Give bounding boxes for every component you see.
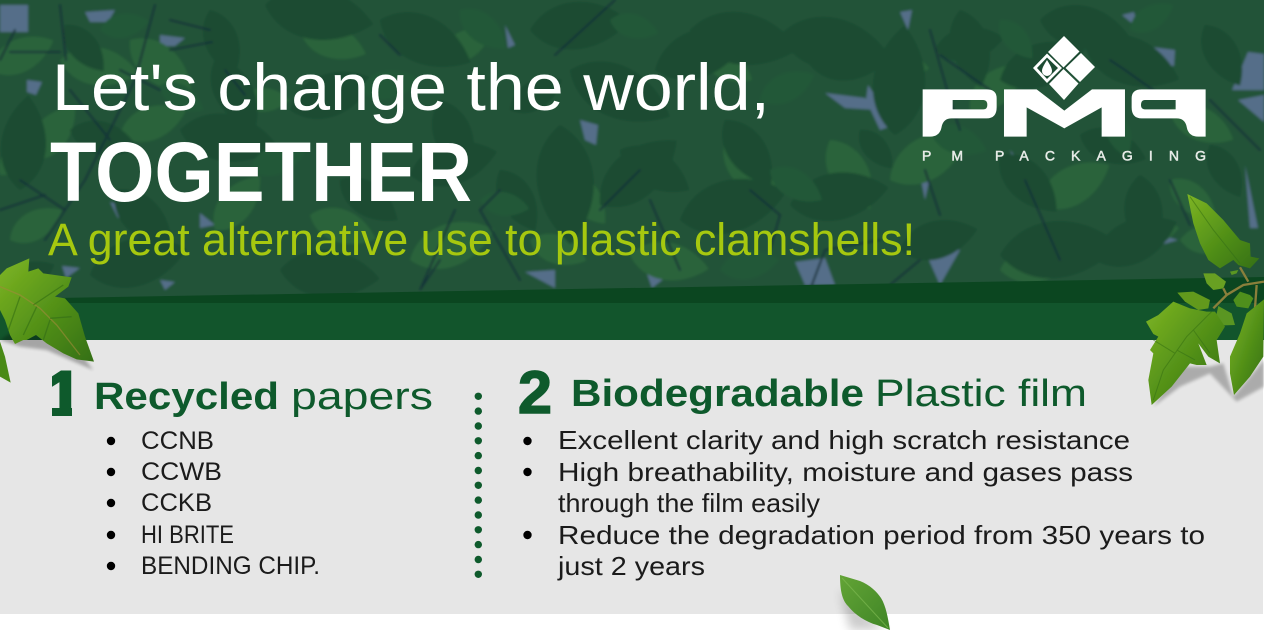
numeral 1: 1 (46, 358, 82, 430)
icon: logo diamonds (1033, 36, 1095, 100)
logo letters PM9 (923, 89, 1206, 137)
heading: recycled papers (94, 376, 433, 418)
dotted column divider (475, 393, 482, 578)
large lower leaf (1146, 302, 1225, 405)
foliage photo background (0, 0, 1264, 305)
leaf: bottom small leaf (840, 575, 890, 630)
stem (1213, 267, 1264, 308)
list: film benefits: just 2 years (557, 551, 705, 581)
list: paper types: CCNB (141, 427, 214, 455)
leaf: top-right tomato branch (1146, 194, 1264, 407)
small leaflets (1230, 270, 1238, 275)
leaf layer dark (0, 0, 1255, 303)
list: paper types: CCKB (141, 489, 212, 517)
heading: biodegradable plastic film (571, 373, 1087, 415)
panel: grey content area (0, 340, 1263, 614)
list: film benefits: Reduce the degradation period from 350 years to (558, 520, 1205, 550)
leaf layer mid (98, 0, 1179, 284)
list: paper types: CCWB (141, 458, 222, 486)
list: film benefits: Excellent clarity and high scratch resistance (558, 425, 1130, 455)
list: paper types: HI BRITE (141, 521, 234, 549)
tagline: A great alternative use to plastic clamshells! (48, 214, 915, 265)
leaf layer light (0, 14, 1241, 288)
heading: let's change the world: Let's change the world, (52, 50, 770, 124)
numeral 2: 2 (518, 359, 552, 426)
heading: recycled papers: Recycled (94, 376, 279, 418)
green ribbon band (0, 277, 1264, 340)
leaf: top-left tomato leaf (0, 258, 94, 383)
right leaf (1230, 299, 1264, 395)
heading: together: TOGETHER (50, 125, 472, 219)
logo wordmark: PM (922, 148, 963, 164)
list: paper types: BENDING CHIP. (141, 552, 320, 580)
tint over photo (0, 0, 1264, 305)
upper leaf (1187, 194, 1259, 268)
white strip at bottom (0, 614, 1264, 630)
list: paper types (107, 427, 320, 580)
heading: biodegradable plastic film: Biodegradable (571, 373, 864, 415)
list: film benefits (523, 425, 1205, 581)
heading: recycled papers: papers (291, 376, 433, 418)
heading: biodegradable plastic film: Plastic film (875, 373, 1087, 415)
section 1: recycled papers (52, 370, 432, 574)
list: film benefits: through the film easily (558, 488, 820, 518)
list: film benefits: High breathability, moisture and gases pass (558, 457, 1133, 487)
logo: PM Packaging: PACKAGING (995, 148, 1206, 164)
section 2: biodegradable plastic film (518, 359, 1205, 581)
logo: PM Packaging (922, 36, 1206, 164)
